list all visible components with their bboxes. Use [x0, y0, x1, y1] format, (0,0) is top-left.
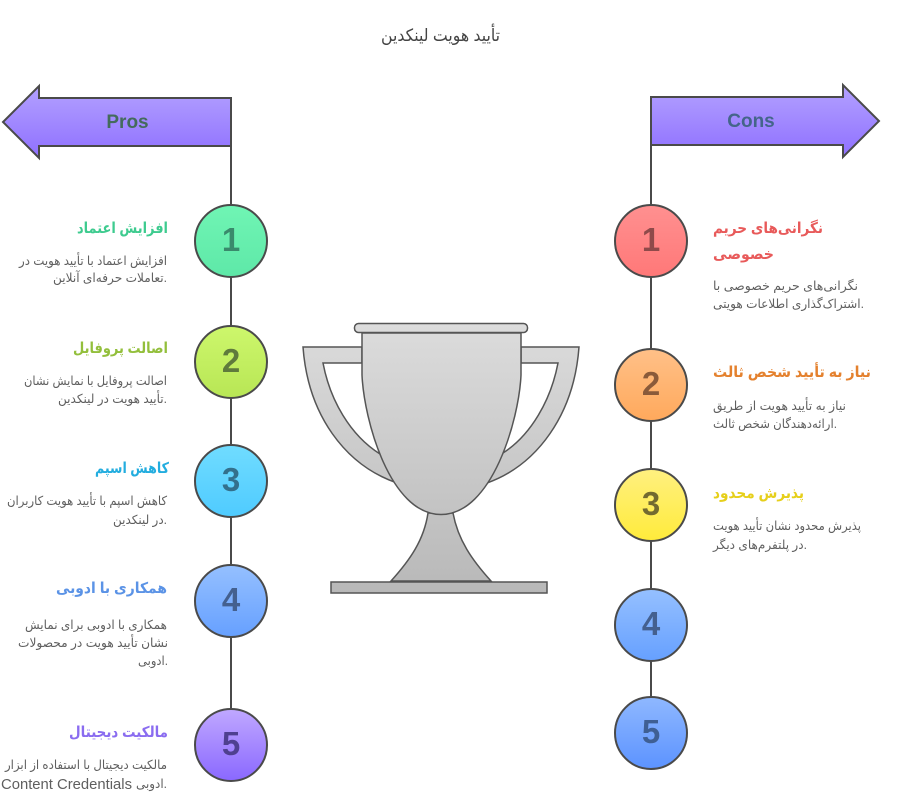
- pros item 2: تأیید هویت در لینکدین.: [58, 390, 167, 407]
- pros item 2: 2: [222, 342, 240, 379]
- cons item 4: 4: [642, 605, 661, 642]
- cons item 3: [615, 469, 861, 553]
- pros item 4: ادوبی.: [138, 654, 168, 669]
- pros item 1: افزایش اعتماد: [77, 220, 168, 237]
- cons item 2: ارائه‌دهندگان شخص ثالث.: [713, 416, 837, 432]
- cons item 1: اشتراک‌گذاری اطلاعات هویتی.: [713, 296, 864, 312]
- cons item 1: 1: [642, 221, 660, 258]
- cons item 3: پذیرش محدود: [713, 485, 804, 503]
- title: تأیید هویت لینکدین: [381, 23, 500, 45]
- pros item 1: افزایش اعتماد با تأیید هویت در: [18, 252, 167, 269]
- pros item 2: اصالت پروفایل با نمایش نشان: [24, 374, 167, 389]
- pros item 5: مالکیت دیجیتال با استفاده از ابزار: [4, 758, 167, 773]
- connector: cons timeline: [650, 145, 652, 733]
- pros item 3: [7, 445, 267, 528]
- arrow: pros: Pros: [106, 112, 149, 133]
- arrow: cons: Cons: [727, 111, 775, 132]
- cons item 3: در پلتفرم‌های دیگر.: [712, 537, 807, 553]
- pros item 2: [24, 326, 267, 407]
- pros item 1: [18, 205, 267, 286]
- pros item 4: همکاری با ادوبی: [56, 580, 167, 597]
- cons item 2: [615, 349, 871, 432]
- cons item 3: پذیرش محدود نشان تأیید هویت: [713, 517, 861, 534]
- pros item 5: مالکیت دیجیتال: [69, 724, 168, 741]
- pros item 4: نشان تأیید هویت در محصولات: [18, 634, 168, 651]
- cons item 3: 3: [642, 485, 660, 522]
- cons item 1: نگرانی‌های حریم خصوصی با: [713, 278, 858, 294]
- cons item 1: [615, 205, 864, 312]
- pros item 3: در لینکدین.: [113, 513, 167, 528]
- pros item 5: [1, 709, 267, 793]
- icon: trophy: [303, 324, 579, 593]
- pros item 3: کاهش اسپم: [95, 460, 169, 478]
- cons item 2: نیاز به تأیید هویت از طریق: [713, 397, 846, 414]
- pros item 3: کاهش اسپم با تأیید هویت کاربران: [7, 492, 167, 509]
- pros item 5: 5: [222, 725, 240, 762]
- cons item 4: [615, 589, 687, 661]
- pros item 3: 3: [222, 461, 240, 498]
- pros item 1: 1: [222, 221, 240, 258]
- pros item 4: [18, 565, 267, 669]
- cons item 5: [615, 697, 687, 769]
- cons item 5: 5: [642, 713, 660, 750]
- pros item 4: 4: [222, 581, 241, 618]
- pros item 5: Content Credentials: [1, 776, 132, 793]
- cons item 2: 2: [642, 365, 660, 402]
- pros item 2: اصالت پروفایل: [73, 340, 168, 358]
- arrow: cons: [651, 85, 879, 157]
- cons item 1: خصوصی: [713, 246, 774, 263]
- arrow: pros: [3, 86, 231, 158]
- pros item 4: همکاری با ادوبی برای نمایش: [25, 618, 167, 633]
- cons item 2: نیاز به تأیید شخص ثالث: [713, 362, 871, 381]
- connector: pros timeline: [230, 146, 232, 745]
- pros item 5: ادوبی.: [136, 777, 167, 792]
- cons item 1: نگرانی‌های حریم: [713, 219, 823, 237]
- pros item 1: تعاملات حرفه‌ای آنلاین.: [53, 270, 167, 286]
